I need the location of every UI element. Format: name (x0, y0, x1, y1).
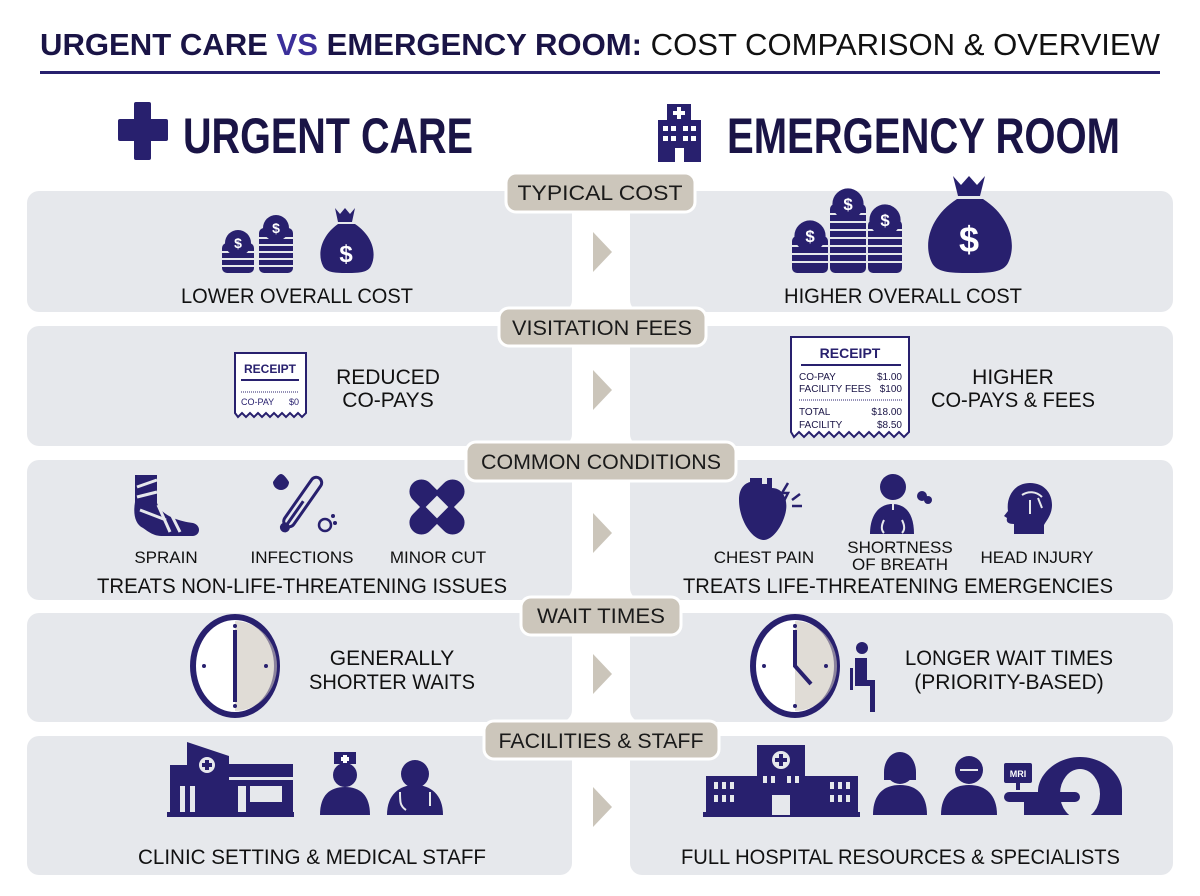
icon: medical cross (118, 102, 168, 160)
icon: clock short wait (193, 617, 277, 715)
icon: large coin stacks and bag (792, 176, 1012, 273)
icon: receipt large: $8.50 (877, 420, 902, 431)
arrow (593, 232, 612, 272)
text: longer wait times: LONGER WAIT TIMES (905, 647, 1113, 670)
icon: small coin stacks and bag (222, 208, 374, 273)
row 3: common conditions (27, 460, 1173, 600)
icon: clock long wait with person (753, 617, 875, 715)
text: reduced co-pays: CO-PAYS (342, 389, 434, 412)
icon: receipt small (235, 353, 306, 417)
pill: visitation fees: VISITATION FEES (512, 317, 692, 340)
label: infections: INFECTIONS (251, 548, 353, 567)
icon: receipt large: CO-PAY (799, 372, 836, 383)
label: shortness of breath: OF BREATH (852, 555, 948, 574)
pill: facilities & staff (484, 721, 719, 759)
arrow (593, 654, 612, 694)
heading: urgent care: URGENT CARE (183, 108, 473, 164)
text: higher co-pays & fees: CO-PAYS & FEES (931, 389, 1095, 412)
icon: receipt large: $100 (880, 384, 902, 395)
text: longer wait times (905, 647, 1113, 694)
pill: visitation fees (499, 308, 706, 346)
text: clinic setting: CLINIC SETTING & MEDICAL STAFF (138, 846, 486, 869)
icon: large coin stacks and bag: $ (959, 219, 979, 260)
pill: wait times: WAIT TIMES (537, 605, 665, 628)
text: reduced co-pays (336, 366, 440, 412)
label: chest pain: CHEST PAIN (714, 548, 814, 567)
label: minor cut: MINOR CUT (390, 548, 486, 567)
text: full hospital: FULL HOSPITAL RESOURCES & SPECIALISTS (681, 846, 1120, 869)
text: lower overall cost: LOWER OVERALL COST (181, 285, 413, 308)
text: longer wait times: (PRIORITY-BASED) (914, 671, 1104, 694)
text: treats non-life-threatening: TREATS NON-LIFE-THREATENING ISSUES (97, 575, 507, 598)
text: higher co-pays & fees: HIGHER (972, 366, 1054, 389)
icon: sprain foot (134, 475, 199, 536)
arrow (593, 513, 612, 553)
arrow (593, 787, 612, 827)
text: higher co-pays & fees (931, 366, 1095, 412)
icon: receipt large: TOTAL (799, 407, 831, 418)
icon: female doctor (873, 752, 927, 815)
text: higher overall cost: HIGHER OVERALL COST (784, 285, 1022, 308)
text: generally shorter waits: SHORTER WAITS (309, 671, 475, 694)
icon: receipt small: RECEIPT (244, 362, 297, 376)
pill: typical cost: TYPICAL COST (518, 182, 683, 205)
pill: common conditions: COMMON CONDITIONS (481, 451, 721, 474)
icon: mri machine: MRI (1010, 769, 1026, 779)
icon: receipt large: FACILITY (799, 420, 843, 431)
icon: male doctor (941, 756, 997, 815)
text: generally shorter waits: GENERALLY (330, 647, 454, 670)
icon: heart (739, 478, 802, 540)
icon: hospital building (658, 104, 701, 162)
row 5: facilities & staff (27, 736, 1173, 875)
text: treats life-threatening: TREATS LIFE-THREATENING EMERGENCIES (683, 575, 1113, 598)
row 2: visitation fees (27, 326, 1173, 446)
pill: wait times (521, 597, 681, 635)
icon: receipt large: $18.00 (871, 407, 902, 418)
icon: bandage (404, 474, 470, 540)
text: reduced co-pays: REDUCED (336, 366, 440, 389)
icon: receipt small: CO-PAY (241, 397, 274, 407)
icon: head (1004, 483, 1052, 534)
icon: thermometer infection (273, 474, 337, 535)
icon: doctor (387, 760, 443, 815)
pill: typical cost (506, 173, 695, 212)
icon: hospital (703, 745, 860, 817)
pill: facilities & staff: FACILITIES & STAFF (498, 730, 704, 753)
arrow (593, 370, 612, 410)
icon: clinic building (167, 742, 294, 817)
icon: small coin stacks and bag: $ (339, 241, 353, 268)
icon: nurse (320, 752, 370, 815)
icon: receipt large: FACILITY FEES (799, 384, 871, 395)
row 1: typical cost (27, 176, 1173, 312)
heading: emergency room (658, 104, 1120, 164)
icon: receipt small: $0 (289, 397, 299, 407)
icon: receipt large: RECEIPT (820, 345, 881, 361)
icon: breath (870, 474, 932, 534)
pill: common conditions (466, 442, 736, 481)
row 4: wait times (27, 613, 1173, 722)
title: URGENT CARE VS EMERGENCY ROOM: COST COMPARISON & OVERVIEW (40, 27, 1161, 62)
label: head injury: HEAD INJURY (980, 548, 1094, 567)
icon: receipt large (791, 337, 909, 437)
label: sprain: SPRAIN (134, 548, 198, 567)
heading: urgent care (118, 102, 473, 164)
label: shortness of breath: SHORTNESS (847, 538, 953, 557)
icon: receipt large: $1.00 (877, 372, 902, 383)
label: shortness of breath (847, 538, 953, 574)
text: generally shorter waits (309, 647, 475, 694)
icon: mri machine (1004, 757, 1122, 819)
